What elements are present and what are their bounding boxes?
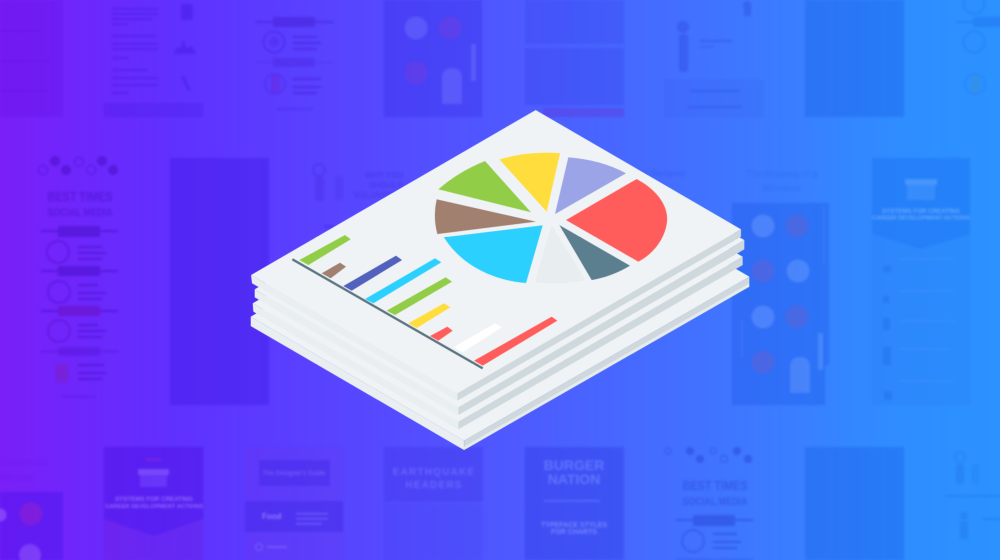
slice: cyan xyxy=(444,225,543,283)
bar: long red xyxy=(474,317,557,366)
bar: indigo xyxy=(343,256,402,291)
bar: green 2 xyxy=(387,277,452,315)
thumbnail: banner card bottom left: CAREER DEVELOPMENT ACTIONS xyxy=(105,504,203,510)
thumbnail: dark icons card top xyxy=(384,0,482,117)
bar chart xyxy=(292,235,557,368)
slice: yellow xyxy=(499,153,560,212)
thumbnail: person card top xyxy=(665,1,764,117)
thumbnail: burger nation card: NATION xyxy=(548,471,600,487)
thumbnail: list card top xyxy=(104,4,203,117)
chart axis xyxy=(292,259,483,368)
thumbnail: banner card right: CAREER DEVELOPMENT ACTIONS xyxy=(872,216,970,222)
thumbnail: person volunteering card: WHY YOU xyxy=(365,171,403,180)
slice: light grey xyxy=(535,225,585,283)
thumbnail: person volunteering card: SHOULD xyxy=(369,181,403,190)
thumbnail: designer card bottom: The Designer's Guide xyxy=(263,470,326,477)
sheet 3 xyxy=(253,139,743,429)
thumbnail: burger nation card: BURGER xyxy=(544,457,604,473)
thumbnail: dark card top right xyxy=(805,0,904,117)
thumbnail: dark icons card right: Milestone xyxy=(763,183,801,193)
bar: cyan xyxy=(365,258,441,303)
thumbnail: dark card bottom right xyxy=(805,447,904,560)
thumbnail: dark icons card bottom left: Milestone xyxy=(0,473,35,482)
thumbnail: dark icons card bottom left: Anatomy of a xyxy=(0,458,48,467)
thumbnail: dark card left xyxy=(170,158,269,405)
thumbnail: burger nation card: FOR CHARTS xyxy=(551,529,597,536)
thumbnail: best times left: BEST TIMES xyxy=(48,189,113,204)
thumbnail: burger nation card: TYPEFACE STYLES xyxy=(541,522,607,529)
thumbnail: dark icons card right: The Anatomy of a xyxy=(747,169,817,179)
thumbnail: person volunteering card xyxy=(313,164,403,228)
slice: green xyxy=(438,161,531,212)
stacked report sheets illustration xyxy=(251,110,749,450)
slice: red xyxy=(566,179,667,262)
thumbnail: best times left: SOCIAL MEDIA xyxy=(48,207,113,219)
thumbnail: best times top right xyxy=(956,0,1000,94)
thumbnail: headers card bottom: HEADERS xyxy=(405,480,463,491)
thumbnail: banner card right: SYSTEMS FOR CREATING xyxy=(882,208,960,215)
thumbnail: dark icons card right xyxy=(732,169,829,405)
pie chart xyxy=(435,153,667,283)
thumbnail: best times bottom: BEST TIMES xyxy=(682,478,748,493)
thumbnail: best times bottom xyxy=(665,447,753,560)
thumbnail: dark icons card bottom left xyxy=(0,458,63,560)
thumbnail: burger nation card xyxy=(525,447,624,560)
thumbnail: best times top xyxy=(256,17,333,110)
thumbnail: person card bottom right xyxy=(945,452,1000,539)
thumbnail: dark card top middle xyxy=(525,0,624,117)
slice: periwinkle xyxy=(555,157,626,214)
bar: brown xyxy=(322,263,346,278)
sheet 1 (top) xyxy=(251,110,741,401)
thumbnail: banner card bottom left xyxy=(104,447,203,560)
thumbnail: top-left magenta panel xyxy=(0,0,63,117)
bar: small red xyxy=(430,327,453,341)
thumbnail: banner card bottom left: SYSTEMS FOR CREATING xyxy=(115,496,193,503)
bar: white xyxy=(453,323,502,352)
thumbnail: headers card bottom xyxy=(384,447,483,560)
thumbnail: best times left xyxy=(38,156,118,398)
slice: slate xyxy=(559,225,630,280)
bar: yellow xyxy=(408,303,450,328)
sheet 2 xyxy=(255,124,744,415)
slice: brown xyxy=(435,199,536,234)
thumbnail: heading middle right: The Designer xyxy=(635,169,685,178)
thumbnail: person volunteering card: VOLUNTEER xyxy=(354,191,403,200)
thumbnail: best times bottom: SOCIAL MEDIA xyxy=(682,496,748,508)
bar: green xyxy=(299,235,351,265)
thumbnail: banner card right xyxy=(872,158,970,405)
thumbnail: headers card bottom: EARTHQUAKE xyxy=(393,467,475,478)
thumbnail: designer card bottom xyxy=(245,447,344,560)
sheet 4 (bottom) xyxy=(251,153,749,450)
thumbnail: designer card bottom: Food xyxy=(262,512,282,521)
